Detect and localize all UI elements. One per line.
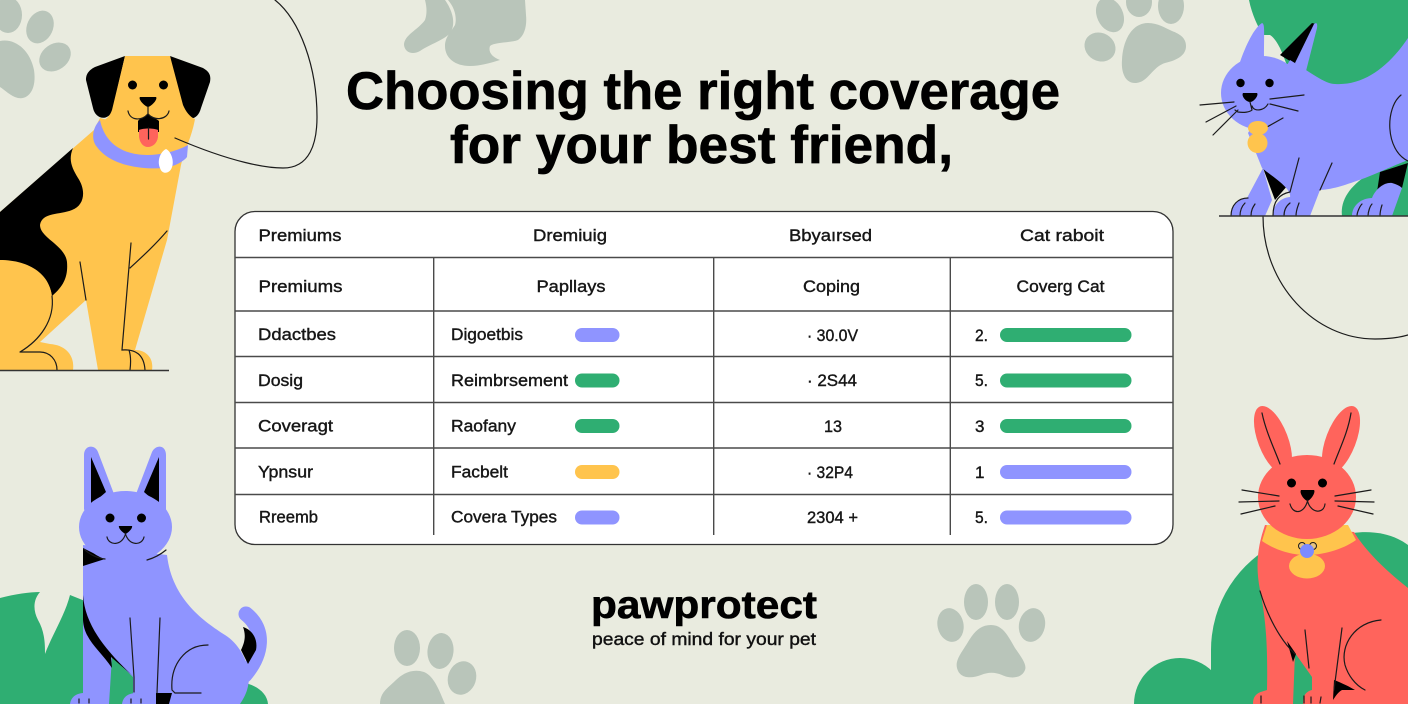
rabbit bell	[1298, 542, 1316, 558]
table row: dosing: Reimbrsement	[451, 371, 568, 390]
illustration: purple cat bottom left	[0, 447, 268, 704]
rabbit collar	[1262, 525, 1356, 555]
table header row: Bbyaırsed	[789, 226, 872, 245]
table subheader row	[258, 277, 1105, 296]
table row: reimbursement: 2304 +	[807, 508, 858, 527]
cat bell	[1248, 121, 1268, 153]
table row: dosing: Dosig	[258, 371, 303, 390]
table row: reimbursement	[259, 508, 1132, 527]
title: Choosing the right coverage	[346, 62, 1060, 121]
table row: dosing	[258, 371, 1132, 390]
table row: expenses	[258, 462, 1132, 482]
cat eyes and nose	[106, 514, 114, 522]
illustration: red rabbit	[1134, 401, 1408, 704]
rabbit dark markings	[1287, 641, 1355, 700]
cat ears	[1240, 23, 1264, 62]
table row: coverage	[258, 416, 1132, 436]
title	[346, 62, 1060, 175]
rabbit tag	[1289, 554, 1325, 578]
table row: deductibles: Ddactbes	[258, 325, 336, 344]
table row: deductibles: Digoetbis	[451, 325, 523, 344]
cat paws	[70, 693, 145, 704]
rabbit body	[1253, 525, 1408, 704]
cat ground line	[1219, 215, 1408, 217]
tagline: peace of mind for your pet	[592, 629, 816, 649]
cat dark markings	[83, 595, 134, 677]
cat leg and paw lines	[1231, 95, 1408, 216]
dog collar	[93, 120, 188, 168]
table row: expenses: · 32P4	[807, 463, 853, 482]
dog black patch	[0, 148, 83, 296]
cat back leg dark	[1377, 163, 1408, 192]
rabbit head	[1258, 455, 1356, 539]
dog head	[100, 56, 195, 152]
table subheader row: Coping	[803, 277, 860, 296]
table row: dosing: · 2S44	[807, 371, 857, 390]
table row: reimbursement: 5.	[975, 508, 988, 527]
paw print: top left	[0, 0, 76, 98]
table row: expenses: 1	[975, 463, 984, 482]
paw print: top right	[1079, 0, 1186, 83]
cat head	[79, 491, 172, 563]
cat head	[1221, 56, 1303, 130]
brand name: pawprotect	[591, 584, 817, 627]
table row: reimbursement: Covera Types	[451, 508, 557, 526]
dog ground line	[0, 370, 169, 372]
rabbit whiskers and lines	[1239, 413, 1381, 703]
cat eyes and nose	[1236, 79, 1245, 87]
cat tail	[245, 614, 259, 675]
table row: deductibles: · 30.0V	[807, 326, 859, 345]
illustration: yellow dog	[0, 56, 210, 370]
table row: deductibles	[258, 325, 1132, 345]
table row: deductibles: 2.	[975, 326, 988, 345]
dog hind leg lines	[20, 296, 57, 370]
rabbit leg gap	[1293, 653, 1312, 704]
cat body	[1248, 38, 1408, 216]
table row: expenses: Facbelt	[451, 462, 508, 482]
comparison table	[235, 212, 1173, 544]
rabbit eyes and nose	[1287, 478, 1296, 488]
dog ears	[86, 56, 210, 118]
green shapes behind cat	[1249, 0, 1408, 100]
dog mouth	[138, 113, 159, 132]
paw print: bottom centre-left	[380, 630, 481, 704]
table header row: Cat raboit	[1020, 226, 1104, 245]
table subheader row: Papllays	[536, 277, 606, 296]
leash line	[175, 0, 317, 168]
illustration: purple cat top right	[1200, 0, 1408, 216]
table row: coverage: Raofany	[451, 416, 517, 436]
table subheader row: Premiums	[258, 277, 342, 296]
table row: expenses: Ypnsur	[258, 462, 313, 482]
cat whiskers and mouth	[1200, 95, 1304, 135]
dog front leg lines	[80, 231, 167, 370]
cat lines	[79, 534, 208, 703]
dog tag	[159, 149, 173, 173]
rabbit ears	[1246, 401, 1300, 479]
paw print: bottom centre-right	[934, 584, 1048, 677]
table row: coverage: Coveragt	[258, 416, 333, 436]
paw print: top centre	[404, 0, 526, 66]
cat ears	[84, 447, 166, 510]
green shapes behind cat	[0, 592, 90, 704]
cat body	[83, 545, 249, 704]
title: for your best friend,	[450, 116, 953, 175]
green shapes behind rabbit	[1211, 531, 1408, 704]
table subheader row: Coverg Cat	[1016, 277, 1105, 296]
table header row	[258, 226, 1104, 245]
table header row: Dremiuig	[533, 226, 607, 245]
table row: coverage: 13	[824, 417, 842, 436]
table row: reimbursement: Rreemb	[259, 508, 318, 526]
table header row: Premiums	[258, 226, 342, 245]
table row: dosing: 5.	[975, 371, 988, 390]
dog eyes and nose	[128, 80, 137, 90]
table row: coverage: 3	[975, 417, 984, 436]
cat leg gap	[109, 657, 133, 704]
decorative arc: right	[1263, 216, 1408, 339]
